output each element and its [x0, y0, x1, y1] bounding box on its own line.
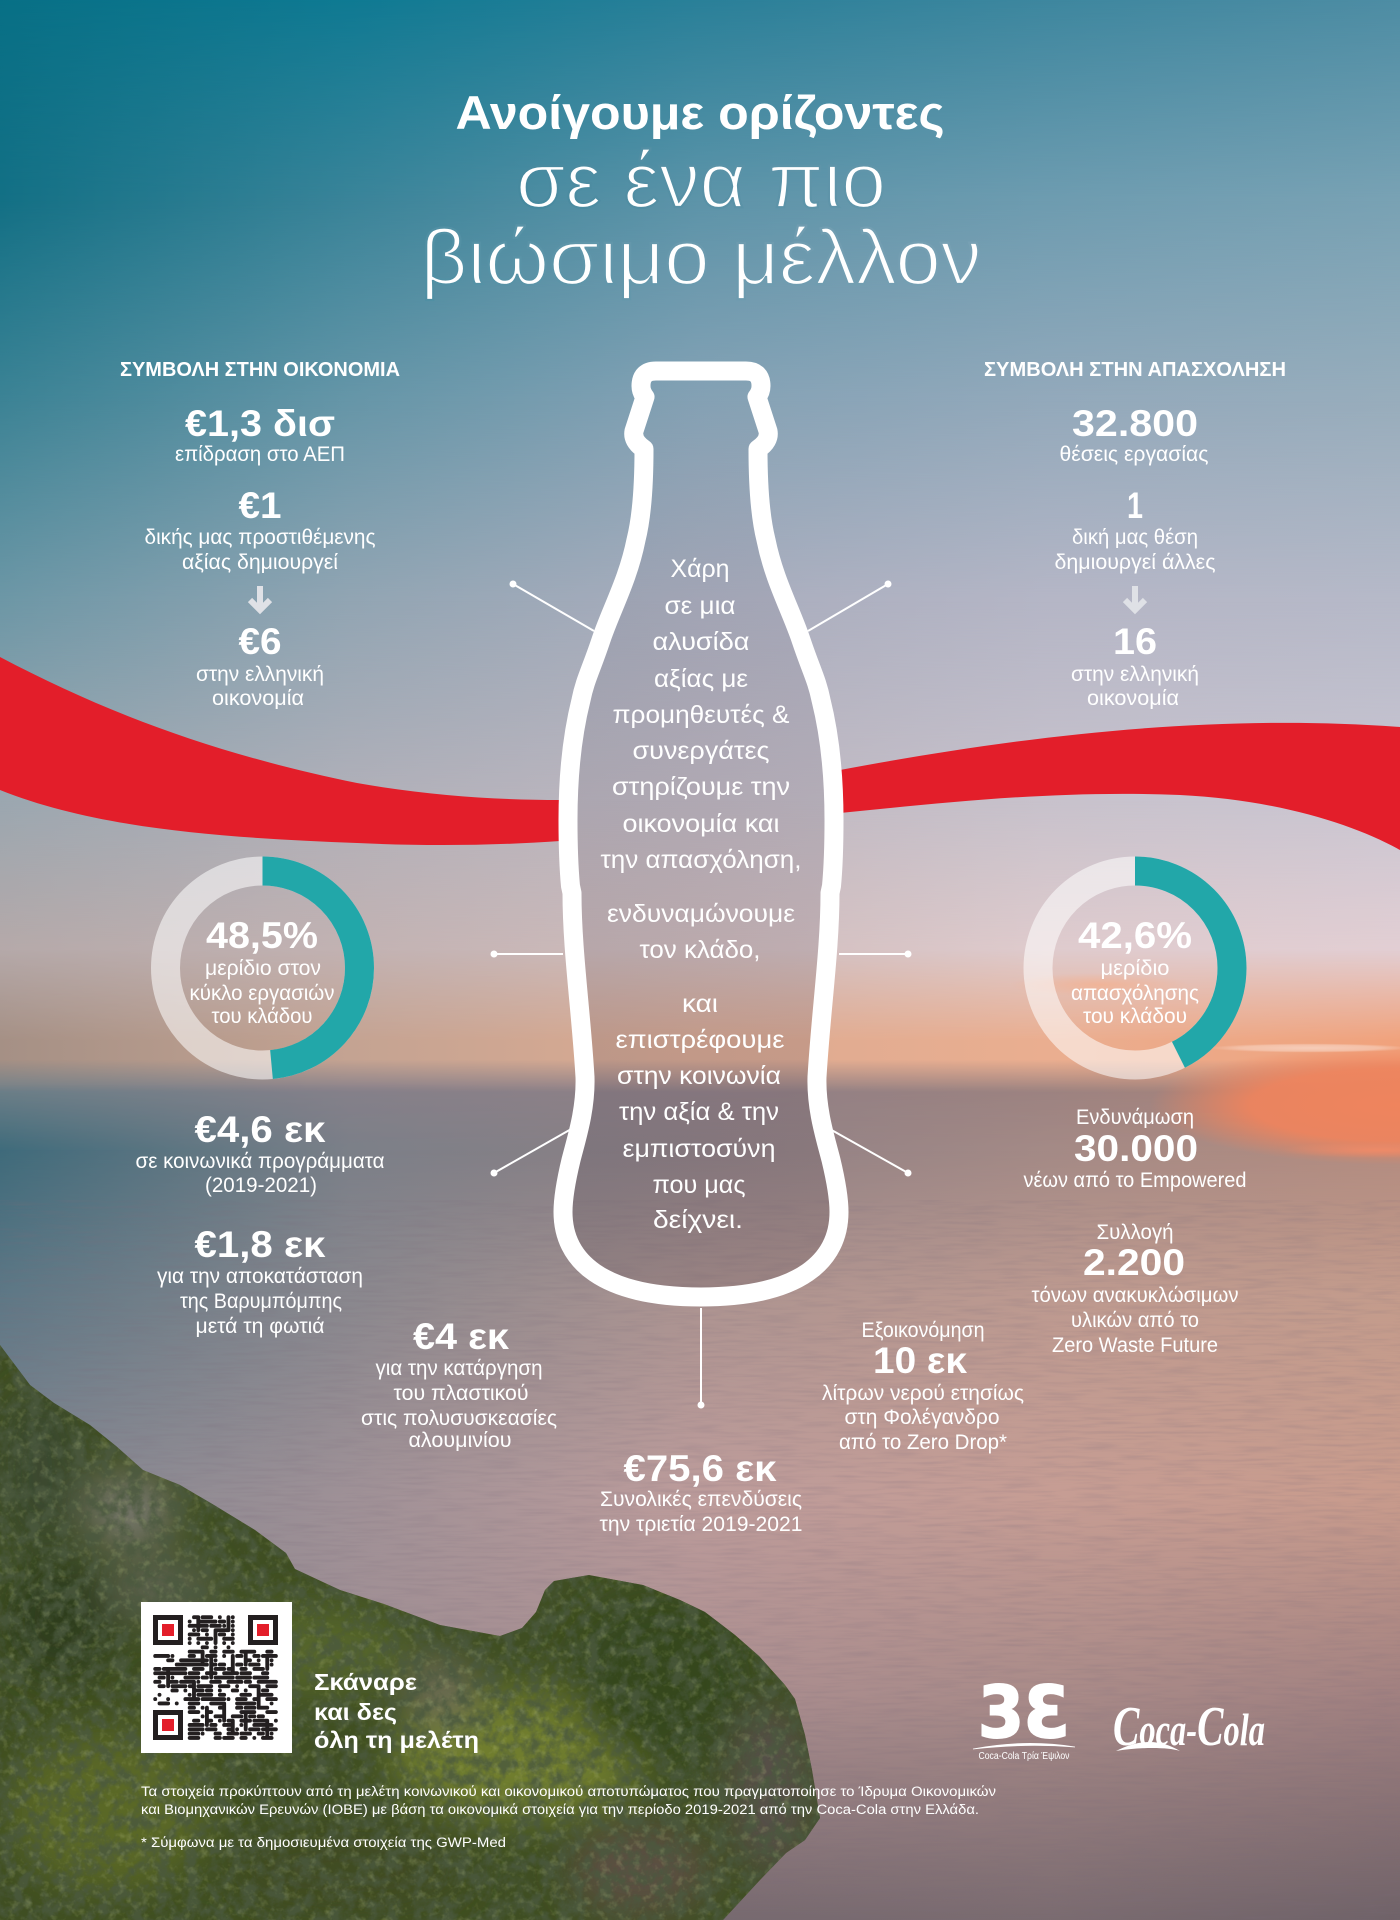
stat: water saving: από το Zero Drop*: [839, 1431, 1007, 1454]
stat: total investment: την τριετία 2019-2021: [600, 1513, 802, 1536]
stat: recyclable materials: 2.200: [1083, 1242, 1185, 1283]
icon: down arrow: [1125, 586, 1145, 610]
stat: plastic removal: αλουμινίου: [408, 1429, 512, 1452]
donut chart: 42.6%: απασχόλησης: [1071, 982, 1199, 1005]
panel: contribution to employment: 1: [1127, 485, 1143, 526]
footnote: Τα στοιχεία προκύπτουν από τη μελέτη κοινωνικού και οικονομικού αποτυπώματος που πραγματοποίησε το Ίδρυμα Οικονομικών: [141, 1784, 996, 1799]
stat: Empowered youth: [1024, 1106, 1246, 1192]
panel: contribution to employment: δική μας θέση: [1072, 526, 1198, 549]
panel: contribution to the economy: €1: [238, 485, 282, 526]
stat: total investment: Συνολικές επενδύσεις: [600, 1488, 802, 1511]
stat: plastic removal: για την κατάργηση: [376, 1357, 542, 1380]
stat: social programmes: (2019-2021): [205, 1174, 317, 1197]
bottle text: επιστρέφουμε: [616, 1026, 784, 1054]
bottle text: που μας: [652, 1171, 746, 1199]
stat: Empowered youth: νέων από το Empowered: [1024, 1169, 1246, 1192]
bottle text: προμηθευτές &: [612, 701, 790, 729]
bottle text: την αξία & την: [619, 1098, 779, 1126]
stat: water saving: [822, 1319, 1024, 1454]
donut chart: 42.6%: 42,6%: [1078, 915, 1192, 956]
panel: contribution to employment: θέσεις εργασίας: [1060, 443, 1208, 466]
panel: contribution to the economy: δικής μας προστιθέμενης: [144, 526, 376, 549]
stat: plastic removal: του πλαστικού: [394, 1382, 528, 1405]
footnote: και Βιομηχανικών Ερευνών (ΙΟΒΕ) με βάση τα οικονομικά στοιχεία για την περίοδο 2019-2021 από την Coca-Cola στην Ελλάδα.: [141, 1802, 979, 1817]
bottle text: εμπιστοσύνη: [622, 1135, 776, 1163]
panel: contribution to employment: οικονομία: [1087, 687, 1179, 710]
panel: contribution to employment: [984, 359, 1286, 710]
stat: Varympompi restoration: €1,8 εκ: [194, 1224, 326, 1265]
bottle outline: [563, 371, 839, 1297]
stat: total investment: [600, 1448, 802, 1536]
QR call to action: όλη τη μελέτη: [314, 1727, 479, 1753]
stat: plastic removal: €4 εκ: [413, 1316, 509, 1357]
stat: water saving: λίτρων νερού ετησίως: [822, 1382, 1024, 1405]
stat: water saving: Εξοικονόμηση: [862, 1319, 984, 1342]
stat: Varympompi restoration: μετά τη φωτιά: [196, 1315, 324, 1338]
stat: social programmes: €4,6 εκ: [194, 1109, 326, 1150]
QR code: [141, 1602, 292, 1753]
stat: Varympompi restoration: για την αποκατάσταση: [157, 1265, 363, 1288]
panel: contribution to employment: δημιουργεί άλλες: [1054, 551, 1216, 574]
donut chart: 48.5%: μερίδιο στον: [205, 957, 321, 980]
logo: Coca-Cola: Coca-Cola: [1113, 1696, 1265, 1758]
stat: Varympompi restoration: της Βαρυμπόμπης: [180, 1290, 342, 1313]
donut chart: 42.6%: του κλάδου: [1083, 1005, 1187, 1028]
red ribbon: right part: [840, 723, 1400, 850]
title: [420, 86, 982, 301]
bottle text: Χάρη: [670, 555, 730, 583]
bottle text: ενδυναμώνουμε: [607, 900, 795, 928]
donut chart: 48.5%: [166, 871, 360, 1065]
donut chart: 48.5%: του κλάδου: [212, 1005, 312, 1028]
stat: social programmes: [136, 1109, 384, 1197]
QR call to action: [314, 1669, 479, 1753]
footnote: * Σύμφωνα με τα δημοσιευμένα στοιχεία της GWP-Med: [141, 1835, 506, 1850]
logo: Coca-Cola Tria Epsilon: 3Ɛ: [978, 1671, 1070, 1754]
bottle text: δείχνει.: [653, 1206, 743, 1234]
stat: recyclable materials: τόνων ανακυκλώσιμων: [1032, 1284, 1238, 1307]
panel: contribution to the economy: αξίας δημιουργεί: [182, 551, 338, 574]
QR call to action: Σκάναρε: [314, 1669, 417, 1695]
stat: Varympompi restoration: [157, 1224, 363, 1338]
donut chart: 42.6%: μερίδιο: [1100, 957, 1170, 980]
panel: contribution to employment: 32.800: [1072, 403, 1198, 444]
bottle text: και: [682, 990, 718, 1018]
stat: Empowered youth: Ενδυνάμωση: [1076, 1106, 1194, 1129]
donut chart: 48.5%: κύκλο εργασιών: [190, 982, 334, 1005]
stat: recyclable materials: [1032, 1221, 1238, 1357]
background: sea: [0, 1040, 1400, 1920]
connector lines and dots: [492, 582, 910, 1408]
bottle text: οικονομία και: [622, 810, 780, 838]
stat: total investment: €75,6 εκ: [624, 1448, 777, 1489]
bottle text: αλυσίδα: [652, 628, 750, 656]
title: σε ένα πιο: [516, 136, 886, 224]
bottle text: στην κοινωνία: [617, 1062, 781, 1090]
panel: contribution to the economy: ΣΥΜΒΟΛΗ ΣΤΗΝ ΟΙΚΟΝΟΜΙΑ: [120, 359, 400, 381]
panel: contribution to the economy: στην ελληνική: [196, 663, 324, 686]
panel: contribution to the economy: €6: [238, 621, 282, 662]
footnote: [141, 1784, 996, 1850]
stat: plastic removal: στις πολυσυσκεασίες: [361, 1407, 557, 1430]
bottle text: στηρίζουμε την: [612, 773, 790, 801]
stat: water saving: στη Φολέγανδρο: [844, 1406, 1000, 1429]
title: βιώσιμο μέλλον: [420, 213, 982, 301]
donut chart: 42.6%: [1038, 871, 1232, 1065]
panel: contribution to the economy: οικονομία: [212, 687, 304, 710]
stat: Empowered youth: 30.000: [1074, 1128, 1198, 1169]
title: Ανοίγουμε ορίζοντες: [456, 86, 944, 139]
stat: water saving: 10 εκ: [873, 1340, 967, 1381]
background: sunset clouds: [1150, 1042, 1400, 1165]
QR call to action: και δες: [314, 1699, 397, 1725]
panel: contribution to the economy: επίδραση στο ΑΕΠ: [175, 443, 345, 466]
stat: plastic removal: [361, 1316, 557, 1452]
bottle text: τον κλάδο,: [640, 936, 760, 964]
bottle text: την απασχόληση,: [600, 846, 802, 874]
stat: recyclable materials: υλικών από το: [1071, 1309, 1199, 1332]
panel: contribution to employment: 16: [1113, 621, 1157, 662]
panel: contribution to the economy: [120, 359, 400, 710]
panel: contribution to the economy: €1,3 δισ: [185, 403, 335, 444]
stat: social programmes: σε κοινωνικά προγράμματα: [136, 1150, 384, 1173]
panel: contribution to employment: ΣΥΜΒΟΛΗ ΣΤΗΝ ΑΠΑΣΧΟΛΗΣΗ: [984, 359, 1286, 381]
stat: recyclable materials: Συλλογή: [1096, 1221, 1174, 1244]
bottle text: αξίας με: [654, 665, 748, 693]
stat: recyclable materials: Zero Waste Future: [1052, 1334, 1218, 1357]
red ribbon: left part: [0, 657, 560, 845]
icon: down arrow: [250, 586, 270, 610]
logo: Coca-Cola Tria Epsilon: Coca-Cola Τρία Έψιλον: [978, 1750, 1070, 1762]
background: green headland: [0, 1340, 830, 1920]
bottle text: σε μια: [664, 592, 736, 620]
donut chart: 48.5%: 48,5%: [206, 915, 318, 956]
background: sky: [0, 0, 1400, 1090]
panel: contribution to employment: στην ελληνική: [1071, 663, 1199, 686]
bottle text: συνεργάτες: [632, 737, 770, 765]
bottle text: [600, 555, 802, 1234]
